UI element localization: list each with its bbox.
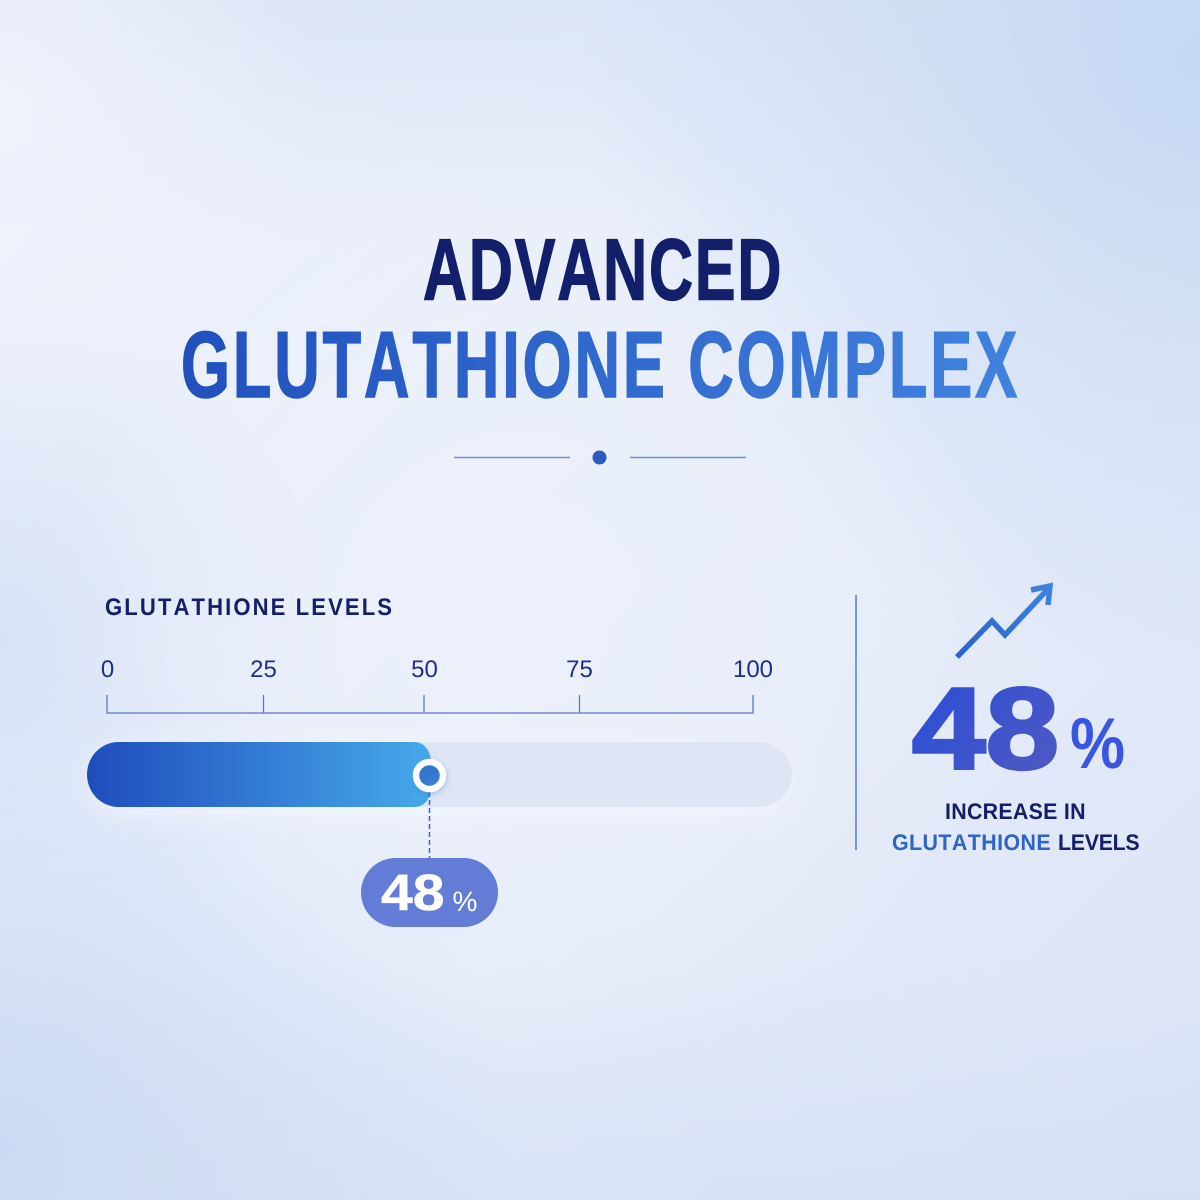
stat caption: GLUTATHIONE (892, 830, 1051, 855)
percent sign: % (1070, 704, 1125, 784)
scale labels (101, 656, 773, 683)
bar track (87, 742, 792, 807)
bar glow (90, 750, 790, 812)
big number: 48 (912, 664, 1059, 794)
panel: increase stat (892, 586, 1140, 855)
bar fill (87, 742, 431, 807)
scale labels: 0 (101, 656, 114, 683)
scale labels: 100 (733, 656, 773, 683)
stat caption: LEVELS (1058, 830, 1140, 855)
value pill: 48 (381, 864, 445, 921)
marker knob (416, 762, 443, 789)
icon: rising arrow (957, 586, 1050, 657)
title (181, 222, 1017, 417)
title line: Glutathione Complex: GLUTATHIONE COMPLEX (181, 312, 1017, 417)
chart heading: GLUTATHIONE LEVELS (105, 594, 392, 621)
dashed leader line (428, 792, 430, 860)
scale labels: 50 (411, 656, 438, 683)
value pill: % (452, 886, 477, 917)
scale axis (107, 695, 753, 713)
divider with dot (454, 450, 746, 464)
title line: Advanced: ADVANCED (423, 222, 781, 318)
stat caption: INCREASE IN (945, 799, 1086, 824)
scale labels: 75 (566, 656, 593, 683)
panel: glutathione levels chart (87, 594, 792, 927)
stat caption (892, 799, 1140, 855)
scale labels: 25 (250, 656, 277, 683)
value pill (361, 858, 498, 927)
vertical divider (855, 595, 857, 850)
